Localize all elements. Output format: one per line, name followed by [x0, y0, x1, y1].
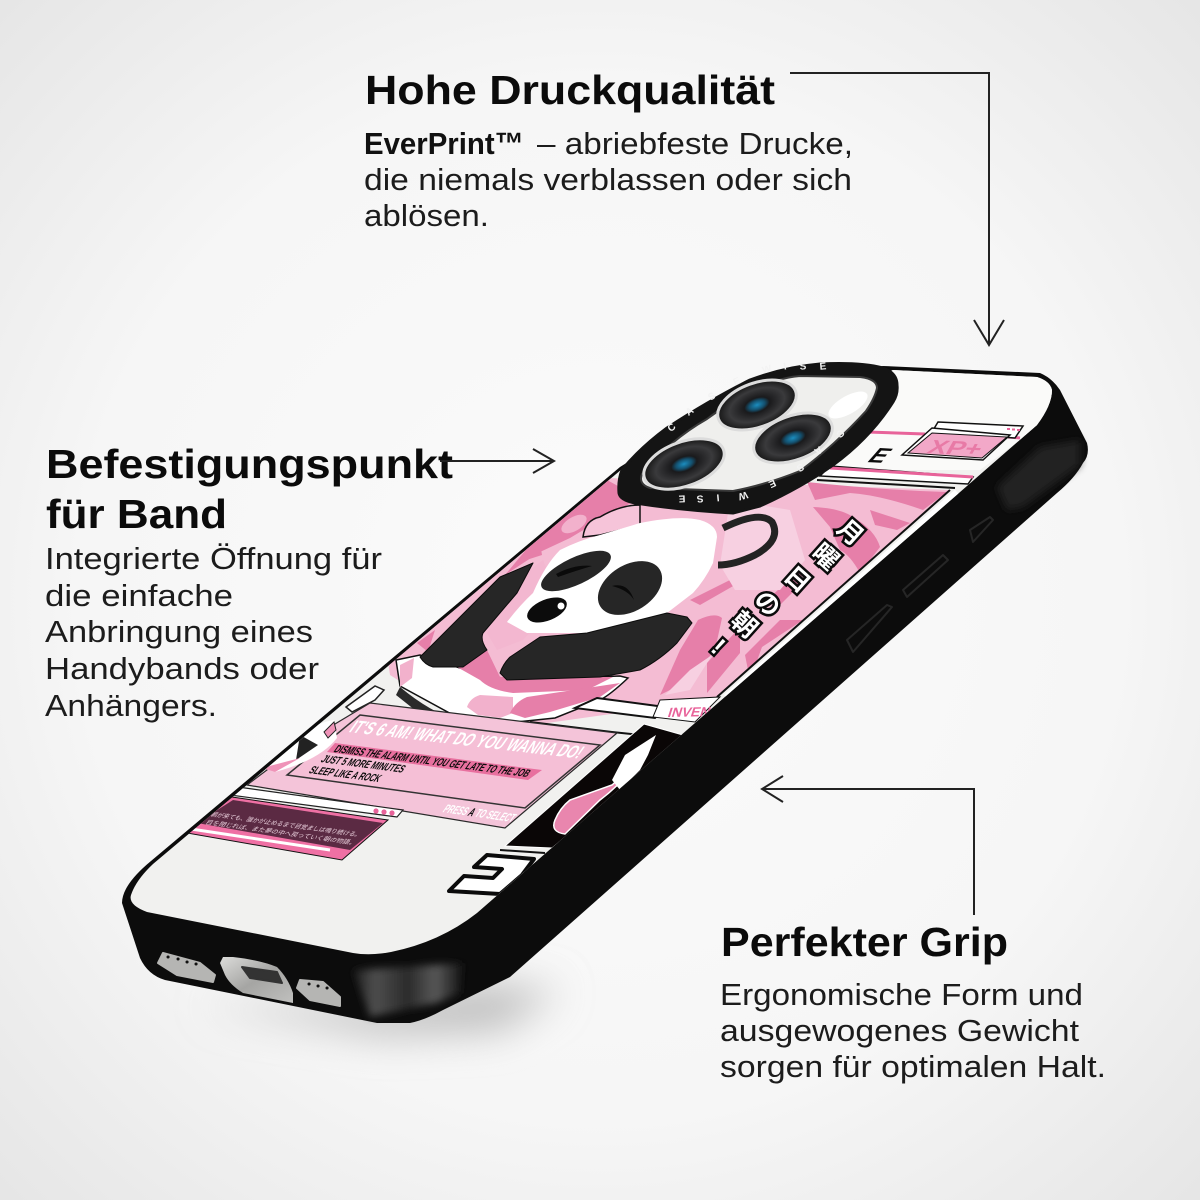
bezel brand text: S	[696, 492, 704, 504]
panda head	[507, 518, 717, 633]
title band	[817, 422, 1023, 488]
panda face pink surround	[487, 560, 560, 650]
body: print quality: – abriebfeste Drucke,	[537, 126, 853, 161]
bezel brand text: E	[732, 375, 743, 388]
side highlight	[997, 440, 1080, 510]
heading: strap attachment: für Band	[46, 491, 227, 537]
printed face	[131, 370, 1052, 954]
callout: strap attachment	[45, 441, 453, 723]
charging and speaker ports	[158, 953, 340, 1006]
vertical japanese lettering: の	[748, 585, 786, 623]
number two badge	[449, 855, 534, 894]
panda illustration panel	[388, 478, 957, 733]
artwork clipped to face	[187, 365, 1060, 894]
black comic panel with pink figure	[500, 724, 690, 853]
heading: perfect grip: Perfekter Grip	[721, 919, 1008, 965]
panda arms	[420, 563, 692, 680]
bezel brand text: S	[794, 461, 806, 474]
bezel inner window	[641, 376, 877, 491]
heading: print quality: Hohe Druckqualität	[365, 67, 775, 113]
body: perfect grip: ausgewogenes Gewicht	[720, 1013, 1079, 1048]
lore text box: 目を閉じれば、また夢の中へ戻っていく朝の物語。	[204, 818, 359, 847]
vertical japanese lettering: 日	[778, 561, 816, 599]
body: strap attachment: Anhängers.	[45, 688, 217, 723]
XP+ badge: XP+	[924, 436, 987, 460]
vertical japanese lettering: 月	[831, 514, 869, 552]
callout: perfect grip	[720, 919, 1106, 1084]
arrow: print quality	[790, 73, 1004, 345]
bezel brand text: W	[761, 363, 774, 377]
vertical japanese lettering: !	[706, 634, 730, 660]
body: print quality	[364, 126, 853, 233]
body: print quality: ablösen.	[364, 198, 489, 233]
stripes below panda	[346, 686, 720, 736]
case body	[122, 366, 1088, 1023]
body: strap attachment: Anbringung eines	[45, 614, 313, 649]
body: perfect grip	[720, 977, 1106, 1084]
bezel brand text: S	[706, 390, 718, 403]
bezel brand text: E	[678, 492, 686, 504]
bezel brand text: W	[736, 488, 749, 502]
camera lenses	[637, 370, 839, 499]
XP+ badge	[902, 422, 1023, 460]
bezel brand text	[666, 361, 846, 504]
arrow: strap attachment	[440, 449, 554, 473]
alarm dialog	[247, 703, 617, 828]
window glare	[824, 386, 872, 424]
inventory tab	[653, 697, 720, 722]
bezel brand text: A	[812, 443, 824, 457]
bezel brand text: E	[819, 361, 827, 373]
band letters: E	[862, 445, 897, 468]
body: print quality: EverPrint™	[364, 126, 524, 161]
blanket	[395, 650, 630, 722]
bezel brand text: I	[783, 361, 788, 373]
bezel brand text: C	[666, 421, 678, 435]
dialog options	[309, 745, 531, 782]
arrow: perfect grip	[762, 776, 974, 915]
heading: strap attachment	[46, 441, 453, 537]
bezel brand text: I	[716, 491, 720, 503]
bezel brand text: S	[799, 361, 807, 373]
dialog heading: IT'S 6 AM! WHAT DO YOU WANNA DO!	[345, 717, 589, 763]
right white border of panel	[717, 490, 950, 697]
vertical japanese lettering	[706, 514, 869, 660]
bottom corner highlight	[353, 963, 463, 1017]
body: strap attachment: Handybands oder	[45, 651, 319, 686]
highlighted option	[327, 743, 542, 780]
phone shadow	[200, 985, 560, 1035]
body: perfect grip: Ergonomische Form und	[720, 977, 1083, 1012]
lore text box: 朝が来ても、誰かが止めるまで目覚ましは鳴り続ける。	[209, 810, 364, 839]
small white figure	[346, 686, 384, 712]
body: perfect grip: sorgen für optimalen Halt.	[720, 1049, 1106, 1084]
heading: strap attachment: Befestigungspunkt	[46, 441, 453, 487]
inventory tab: INVEN	[666, 704, 713, 720]
lore text box	[187, 787, 403, 860]
press a to select: PRESS A TO SELECT	[440, 802, 519, 824]
callout: print quality	[364, 67, 853, 233]
panda nose	[527, 598, 567, 622]
small pink corners	[417, 543, 542, 652]
body: strap attachment	[45, 541, 382, 723]
dialog options: JUST 5 MORE MINUTES	[318, 753, 408, 775]
body: print quality: die niemals verblassen oder sich	[364, 162, 852, 197]
body: strap attachment: die einfache	[45, 578, 233, 613]
headphone ears	[718, 517, 775, 565]
body: strap attachment: Integrierte Öffnung für	[45, 541, 382, 576]
dialog options: DISMISS THE ALARM UNTIL YOU GET LATE TO THE JOB	[331, 743, 534, 780]
ear left	[583, 505, 640, 537]
phone with printed case	[45, 67, 1106, 1084]
pink hair streaks	[505, 480, 947, 695]
vertical japanese lettering: 朝	[725, 606, 763, 644]
bezel brand text: E	[766, 477, 777, 490]
cute peeking character	[262, 720, 337, 772]
bezel brand text: C	[834, 426, 846, 440]
side buttons	[847, 517, 993, 652]
panda eyes	[541, 550, 662, 615]
camera bezel	[619, 361, 897, 513]
dialog options: SLEEP LIKE A ROCK	[306, 764, 385, 785]
vertical japanese lettering: 曜	[806, 538, 844, 576]
bezel brand text: A	[684, 405, 696, 419]
